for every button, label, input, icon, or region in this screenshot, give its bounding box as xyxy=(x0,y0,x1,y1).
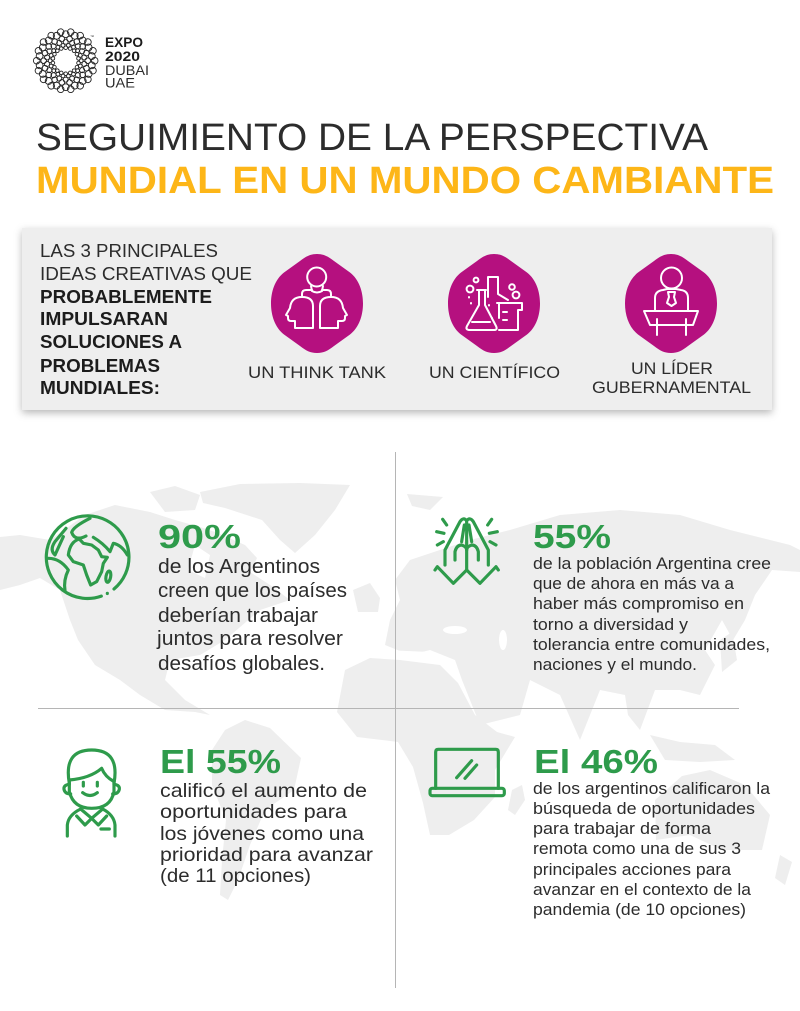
stat: 55% tolerance xyxy=(435,518,771,674)
text block: torno a diversidad y xyxy=(533,616,689,634)
text block: deberían trabajar xyxy=(158,605,318,627)
text block: de los Argentinos xyxy=(158,556,320,578)
label: un líder gubernamental: GUBERNAMENTAL xyxy=(592,378,751,397)
stat: 90%: 90% xyxy=(158,518,241,555)
stat: El 55% youth xyxy=(64,743,374,887)
world map background xyxy=(0,483,800,900)
text block: avanzar en el contexto de la xyxy=(533,881,752,899)
icon: think tank xyxy=(271,254,363,353)
icon: laptop xyxy=(430,749,504,796)
panel intro text: LAS 3 PRINCIPALES xyxy=(40,241,218,261)
logo: Expo 2020 Dubai xyxy=(24,21,149,101)
panel intro text: PROBABLEMENTE xyxy=(40,287,212,307)
text block: prioridad para avanzar xyxy=(160,844,374,866)
text block: remota como una de sus 3 xyxy=(533,840,741,858)
text block: de los argentinos calificaron la xyxy=(533,780,771,798)
panel intro text xyxy=(40,241,252,398)
logo wordmark: UAE xyxy=(105,74,135,90)
text block xyxy=(156,556,347,675)
icon: government leader at podium xyxy=(625,254,717,353)
text block xyxy=(160,780,374,887)
text block: creen que los países xyxy=(158,580,347,602)
text block: tolerancia entre comunidades, xyxy=(533,636,770,654)
title xyxy=(36,117,774,202)
stat: El 46% remote work xyxy=(430,743,771,919)
logo wordmark: ™ xyxy=(90,34,94,39)
text block: pandemia (de 10 opciones) xyxy=(533,901,746,919)
text block: de la población Argentina cree xyxy=(533,555,771,573)
label: un líder gubernamental xyxy=(592,359,751,397)
label: un líder gubernamental: UN LÍDER xyxy=(631,359,713,378)
logo emblem xyxy=(24,21,108,101)
text block: juntos para resolver xyxy=(156,628,343,650)
text block: calificó el aumento de xyxy=(160,780,367,802)
logo wordmark: EXPO xyxy=(105,34,143,50)
text block: haber más compromiso en xyxy=(533,595,744,613)
panel intro text: SOLUCIONES A xyxy=(40,332,182,352)
panel intro text: IMPULSARAN xyxy=(40,309,168,329)
text block xyxy=(533,780,771,919)
logo wordmark: 2020 xyxy=(105,48,140,64)
panel intro text: IDEAS CREATIVAS QUE xyxy=(40,264,252,284)
text block: oportunidades para xyxy=(160,801,347,823)
icon: praying hands xyxy=(435,519,498,583)
title: MUNDIAL EN UN MUNDO CAMBIANTE xyxy=(36,160,774,202)
text block: búsqueda de oportunidades xyxy=(533,800,755,818)
label: un científico: UN CIENTÍFICO xyxy=(429,363,560,382)
stat: El 46% remote work: El 46% xyxy=(534,743,658,780)
title: SEGUIMIENTO DE LA PERSPECTIVA xyxy=(36,117,709,159)
label: un think tank: UN THINK TANK xyxy=(248,363,387,382)
text block: para trabajar de forma xyxy=(533,820,712,838)
text block: desafíos globales. xyxy=(158,653,325,675)
icon: scientist flasks xyxy=(448,254,540,353)
logo wordmark: DUBAI xyxy=(105,62,149,78)
icon: young person xyxy=(64,750,119,836)
icon: globe xyxy=(46,516,129,598)
stat: 90% xyxy=(46,516,347,675)
text block: (de 11 opciones) xyxy=(160,865,311,887)
panel intro text: MUNDIALES: xyxy=(40,378,160,398)
logo wordmark xyxy=(90,34,149,90)
panel intro text: PROBLEMAS xyxy=(40,356,160,376)
text block: naciones y el mundo. xyxy=(533,656,697,674)
stat: El 55% youth: El 55% xyxy=(160,743,281,780)
stat: 55% tolerance: 55% xyxy=(533,518,611,555)
panel: top 3 creative ideas xyxy=(22,228,772,410)
text block: que de ahora en más va a xyxy=(533,575,735,593)
text block: principales acciones para xyxy=(533,861,732,879)
text block: los jóvenes como una xyxy=(160,823,364,845)
text block xyxy=(533,555,771,674)
